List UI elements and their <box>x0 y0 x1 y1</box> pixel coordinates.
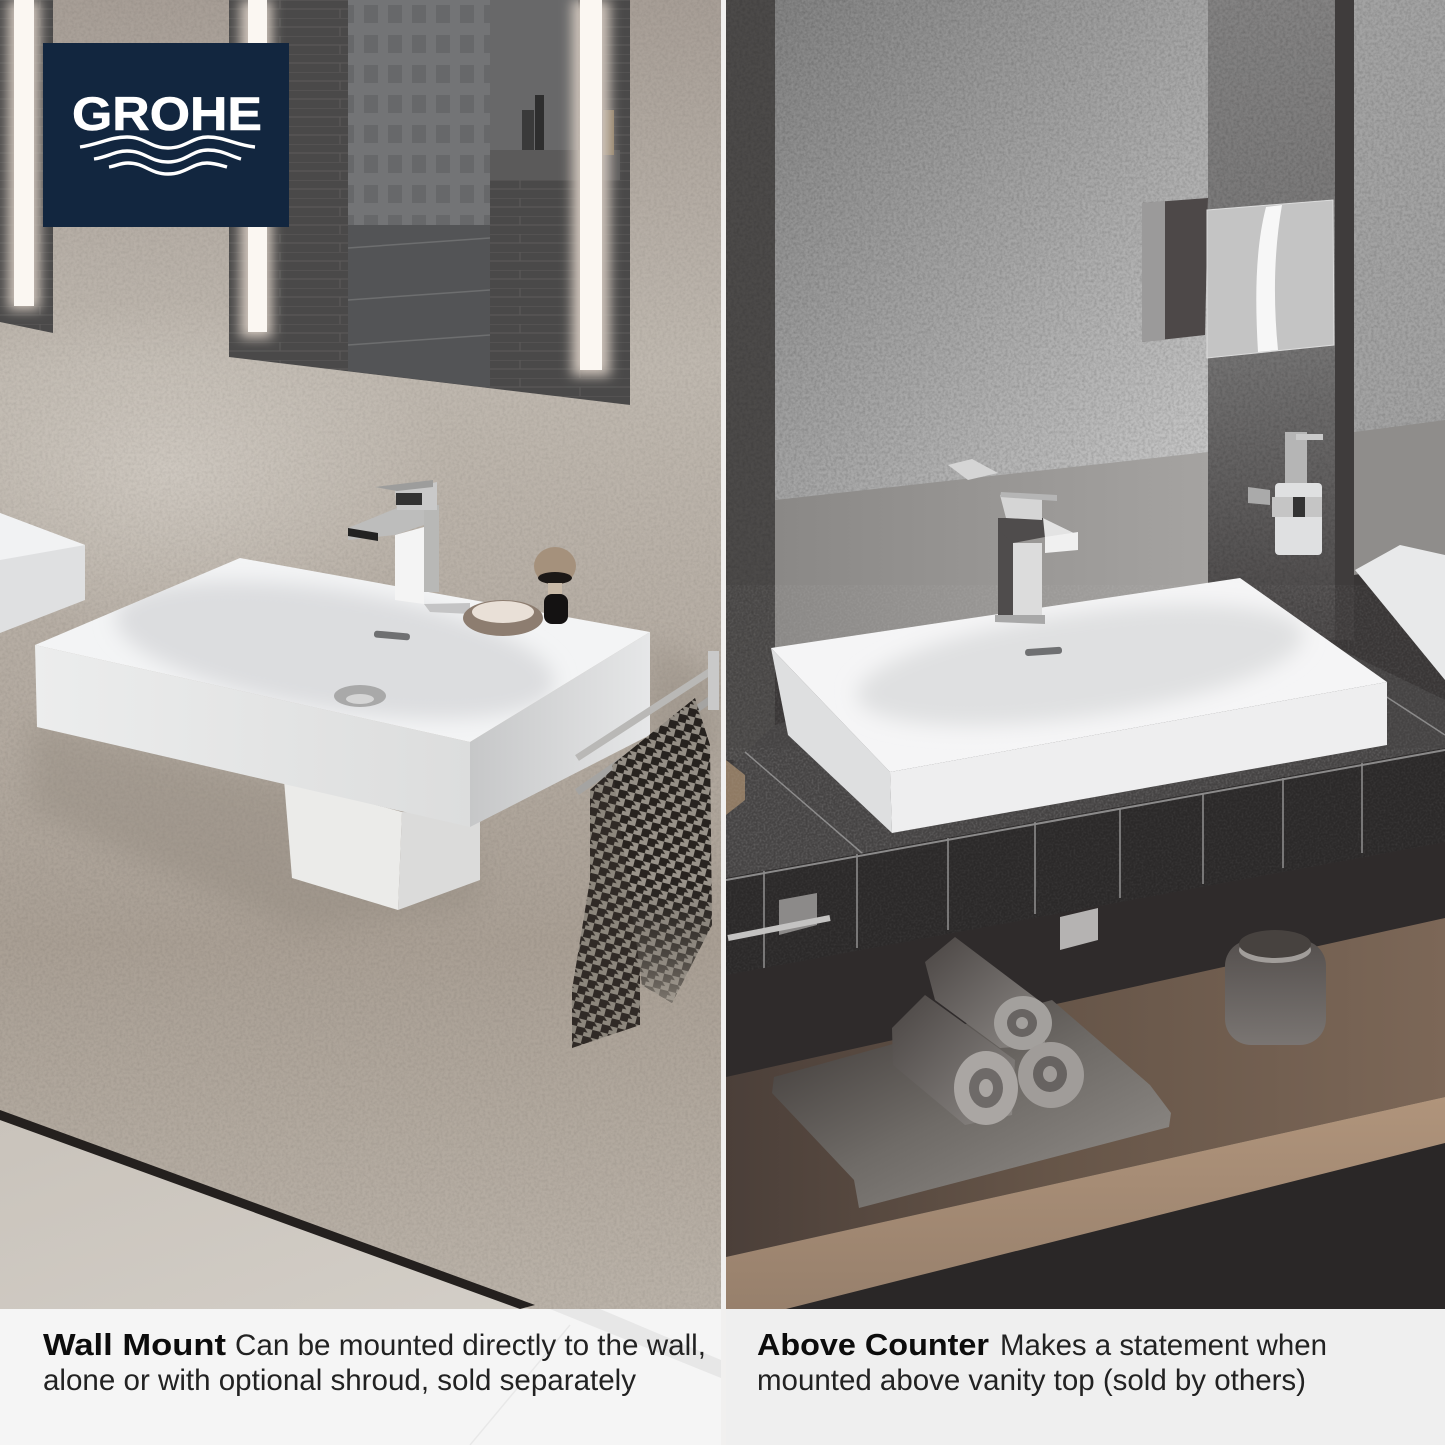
basin top <box>771 578 1387 772</box>
floor <box>0 1120 530 1309</box>
wooden shelf top <box>726 918 1445 1257</box>
soap dispenser <box>1248 432 1323 555</box>
above counter basin <box>771 578 1387 833</box>
soap dish <box>463 600 543 636</box>
shroud under basin <box>284 780 480 910</box>
folded towel <box>772 1000 1171 1208</box>
overflow slot <box>374 630 410 641</box>
mirror back plate <box>1142 198 1208 342</box>
dark floor below shelf <box>726 1120 1445 1309</box>
grey canister <box>1225 930 1326 1045</box>
counter top tile joints <box>745 660 1445 860</box>
centre column <box>1208 0 1335 640</box>
rolled towel left <box>892 995 1018 1125</box>
shaving brush <box>534 547 576 624</box>
caption: above counter <box>726 1309 1445 1445</box>
counter top <box>726 585 1445 878</box>
dark back wall <box>726 574 1445 1257</box>
wooden shelf front <box>726 1097 1445 1309</box>
caption: wall mount: alone or with optional shroud, sold separately <box>43 1364 636 1397</box>
houndstooth towel <box>572 698 712 1048</box>
divider between panels <box>721 0 726 1445</box>
centre wall mirror with light strips <box>229 0 630 405</box>
floor skirting line <box>0 1110 535 1309</box>
basin side face <box>470 632 650 827</box>
wall <box>0 0 721 1309</box>
neighbouring basin <box>0 513 85 633</box>
reflected faucet <box>948 459 998 480</box>
basin wall shadow <box>30 640 720 930</box>
dark strip <box>1335 0 1354 640</box>
basin front face <box>35 645 470 827</box>
wall bracket <box>1060 908 1098 950</box>
towel bar <box>728 893 830 938</box>
caption: above counter: Above Counter <box>757 1327 989 1362</box>
main concrete mirror wall <box>775 0 1208 510</box>
small wooden tray <box>726 760 745 815</box>
right concrete wall <box>1354 0 1445 432</box>
towel rail <box>577 651 719 792</box>
caption: above counter: Makes a statement when <box>1000 1329 1327 1362</box>
basin bowl <box>114 578 556 722</box>
caption: wall mount <box>0 1309 721 1445</box>
basin bowl <box>850 582 1310 748</box>
caption: above counter: mounted above vanity top (sold by others) <box>757 1364 1306 1397</box>
drain <box>334 685 386 707</box>
magnifying mirror <box>1207 200 1334 358</box>
under counter wall <box>726 842 1445 1100</box>
panel: wall mount bathroom scene <box>0 0 721 1309</box>
chrome faucet <box>348 480 470 614</box>
towel back fold <box>572 770 640 1048</box>
caption: wall mount: Can be mounted directly to the wall, <box>235 1329 706 1362</box>
counter tiled front <box>726 748 1445 975</box>
left wall mirror <box>0 0 53 333</box>
right neighbouring basin <box>1355 545 1445 680</box>
panel: above counter bathroom scene <box>726 0 1445 1309</box>
towel front fold <box>612 698 712 1003</box>
rolled towel back <box>925 937 1052 1050</box>
basin front face <box>890 682 1387 833</box>
chrome faucet <box>995 492 1078 624</box>
mirror reflected bottles <box>522 95 614 155</box>
wall mounted basin <box>35 556 650 827</box>
rolled towels <box>892 937 1084 1125</box>
logo: GROHE: GROHE <box>72 87 262 140</box>
rolled towel right <box>1018 1042 1084 1108</box>
logo: GROHE <box>43 43 289 227</box>
overflow slot <box>1025 647 1062 656</box>
right backsplash <box>1354 420 1445 575</box>
basin top <box>35 558 650 742</box>
left dark column <box>726 0 775 760</box>
caption: wall mount: Wall Mount <box>43 1327 226 1362</box>
backsplash <box>775 452 1208 650</box>
basin left face <box>771 648 892 833</box>
